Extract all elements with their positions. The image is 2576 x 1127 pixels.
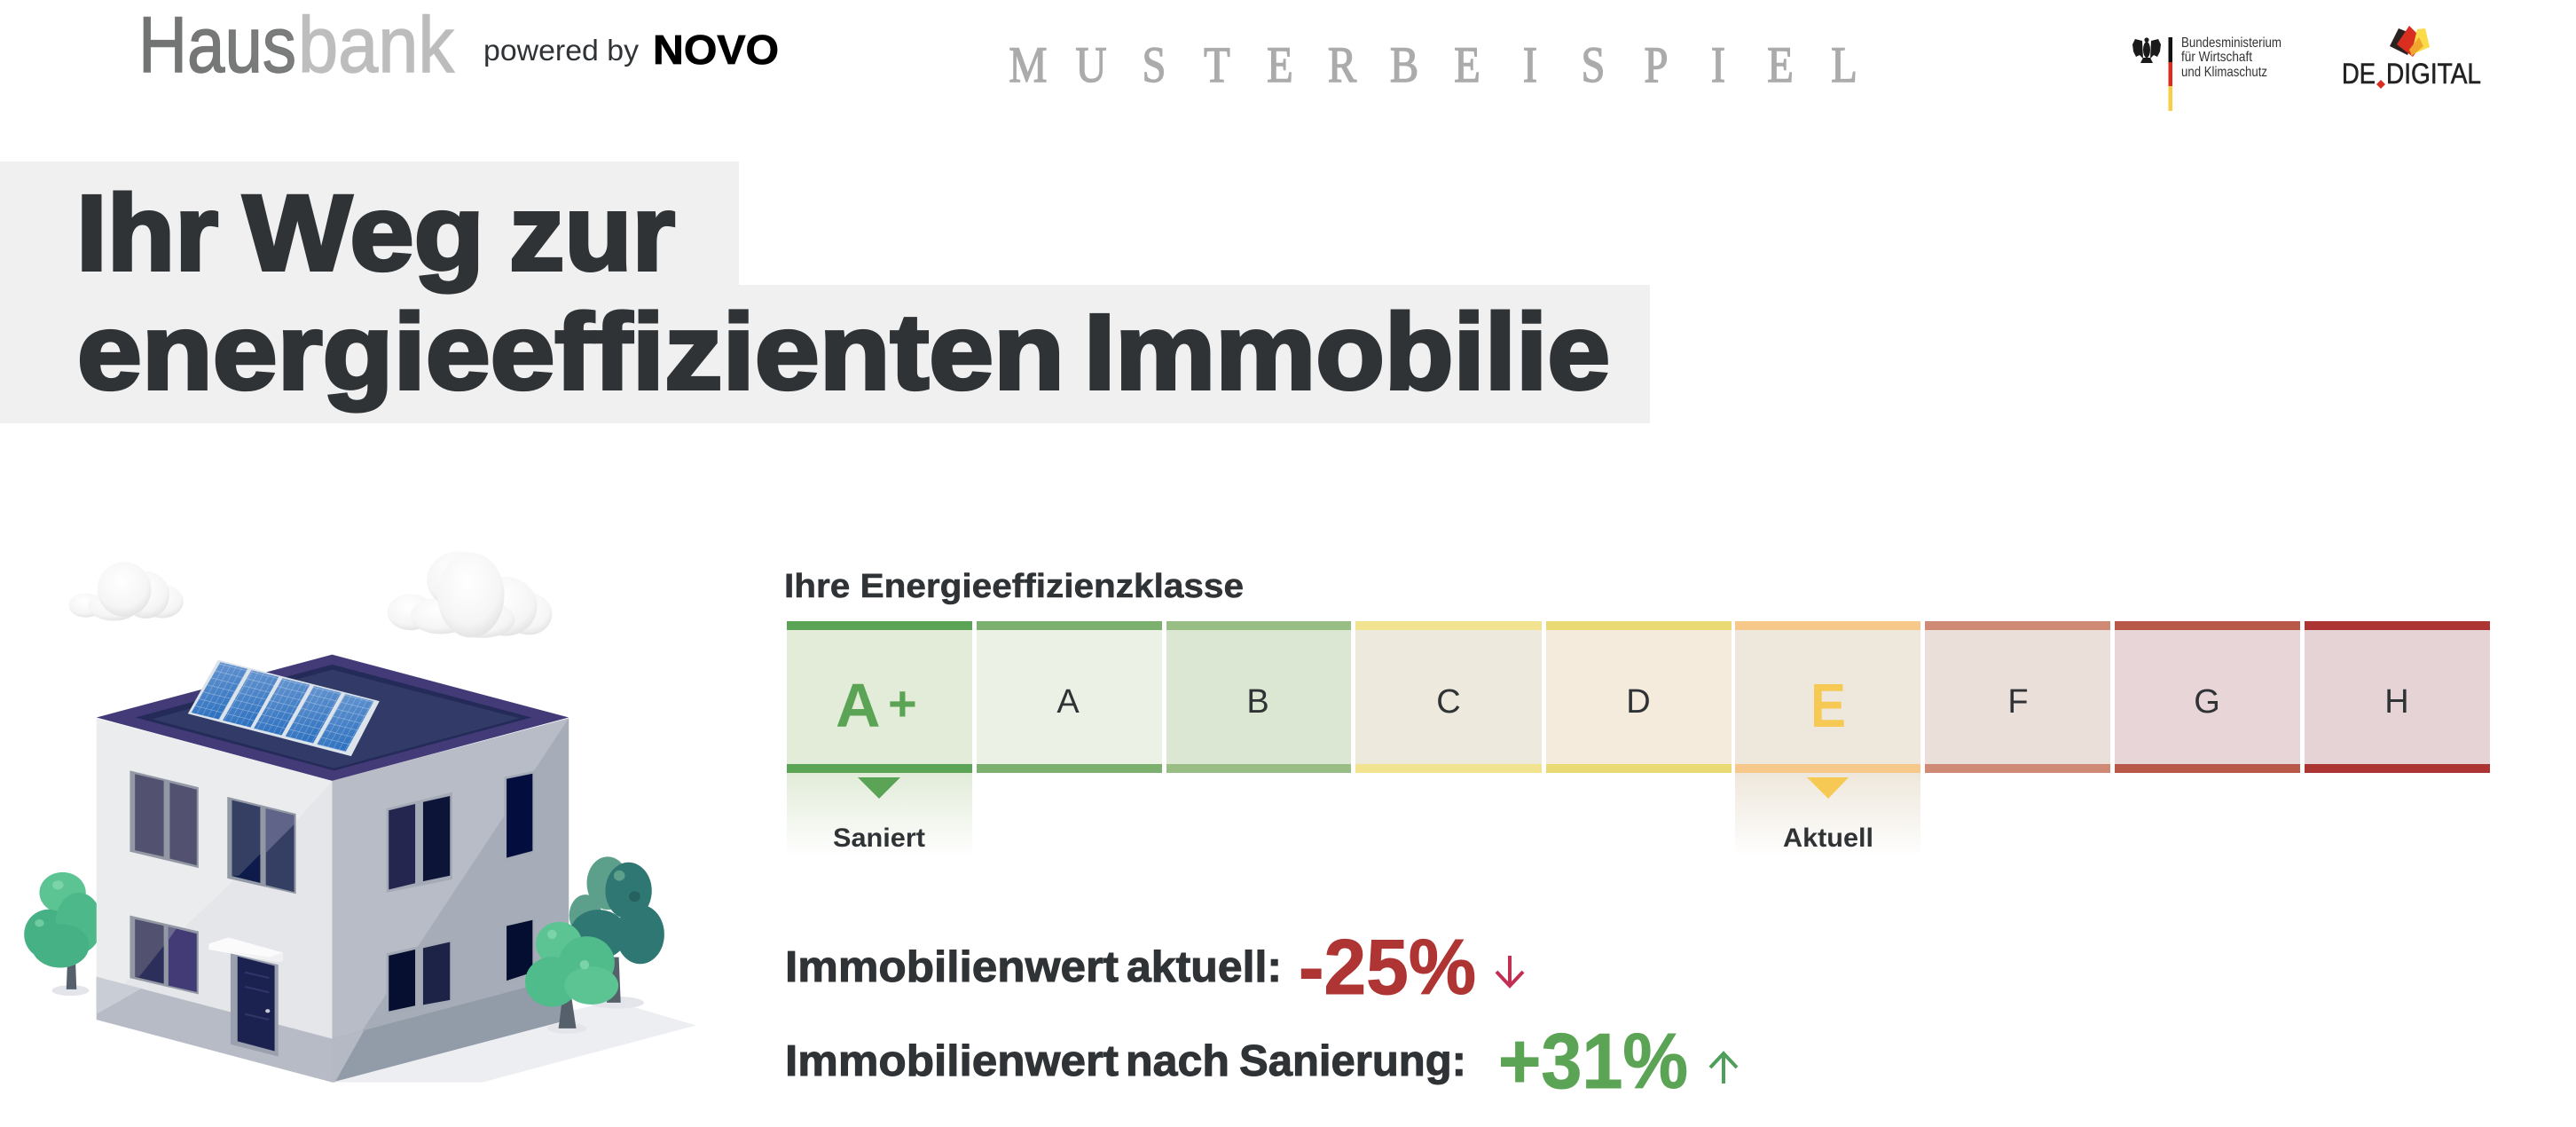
window lower right B [504, 918, 535, 983]
class H [2305, 621, 2490, 773]
label: value after renovation [785, 1037, 1466, 1085]
label: current value: Immobilienwert [785, 943, 1119, 991]
logo: DE.DIGITAL [2342, 26, 2481, 90]
class E: E [1810, 671, 1846, 740]
logo: Bundesministerium für Wirtschaft und Klimaschutz [2132, 35, 2281, 111]
wordmark DE: DE [2342, 58, 2376, 90]
title line 2 [77, 291, 1610, 412]
class C [1355, 621, 1542, 773]
marker: Saniert [787, 773, 972, 857]
class G: G [2194, 683, 2220, 721]
title line 1: Ihr [76, 172, 218, 293]
wordmark DIGITAL: DIGITAL [2386, 58, 2481, 90]
title line 1: Weg [243, 172, 484, 293]
arrow: down [1496, 956, 1523, 986]
title background [0, 162, 1650, 423]
class A+: + [888, 675, 917, 731]
number: -25%: -25% [1299, 923, 1476, 1011]
solar panels [188, 660, 380, 756]
window upper right A [387, 792, 452, 893]
class D: D [1626, 683, 1651, 721]
wall base right highlight [332, 1030, 365, 1083]
ministry name [2181, 35, 2281, 80]
label: value after renovation: Sanierung: [1239, 1037, 1466, 1085]
logo: NOVO: NOVO [653, 27, 779, 73]
class B [1166, 621, 1351, 773]
class A: A [1056, 683, 1080, 721]
logo: Hausbank [138, 0, 454, 89]
tree left [24, 872, 102, 996]
ministry name: Bundesministerium [2181, 35, 2281, 51]
title line 2: energieeffizienten [77, 291, 1064, 412]
class G [2115, 621, 2300, 773]
marker: Aktuell: Aktuell [1783, 824, 1873, 853]
illustration: house with solar panels [24, 551, 695, 1083]
window upper middle [227, 797, 296, 894]
heading: energy class: Ihre Energieeffizienzklasse [784, 568, 1244, 605]
class F: F [2007, 683, 2029, 721]
ground shadow [334, 1001, 695, 1083]
class A [977, 621, 1162, 773]
class E [1735, 621, 1920, 773]
arrow: up [1710, 1053, 1737, 1084]
label: value after renovation: nach [1126, 1037, 1229, 1085]
wall base left [97, 977, 332, 1083]
logo word: Haus: Haus [138, 0, 296, 89]
wall base right [332, 976, 569, 1083]
door [231, 953, 279, 1057]
title line 1 [76, 172, 675, 293]
wall left light reflection [97, 781, 332, 1038]
cloud left [68, 562, 184, 621]
ministry name: für Wirtschaft [2181, 50, 2252, 65]
logo word: bank: bank [298, 0, 454, 89]
text: powered by: powered by [483, 34, 640, 67]
red dot [2376, 80, 2385, 89]
marker: Aktuell [1735, 773, 1920, 857]
icon: federal eagle [2132, 37, 2161, 63]
class C: C [1436, 683, 1461, 721]
tree front right [525, 922, 618, 1034]
window upper left [130, 770, 199, 868]
class A+: A [836, 671, 881, 740]
wall right shaded [362, 718, 569, 1031]
class A+ [787, 621, 972, 773]
wall base highlight [97, 977, 142, 1014]
ministry name: und Klimaschutz [2181, 65, 2267, 80]
label: current value: aktuell: [1127, 943, 1282, 991]
cloud right [388, 551, 552, 638]
class D [1546, 621, 1732, 773]
title line 1: zur [509, 172, 675, 293]
wall right [332, 718, 569, 1083]
wall left [97, 718, 332, 1083]
title line 2: Immobilie [1084, 291, 1610, 412]
window lower left [130, 916, 199, 994]
class B: B [1246, 683, 1269, 721]
icon: coloured squares [2390, 26, 2430, 57]
marker: Saniert: Saniert [833, 824, 925, 853]
heading: title [0, 162, 1650, 423]
label: current value [785, 943, 1282, 991]
watermark: Musterbeispiel: MUSTERBEISPIEL [1009, 37, 1857, 93]
label: value after renovation: Immobilienwert [785, 1037, 1119, 1085]
roof [97, 655, 569, 781]
number: +31%: +31% [1498, 1017, 1688, 1105]
tree back right [569, 856, 664, 1009]
energy class scale [787, 621, 2490, 773]
class H: H [2384, 683, 2409, 721]
class F [1925, 621, 2110, 773]
window upper right B [504, 770, 535, 861]
flag bar [2168, 37, 2172, 111]
window lower right A [387, 939, 452, 1015]
door canopy [208, 937, 283, 962]
